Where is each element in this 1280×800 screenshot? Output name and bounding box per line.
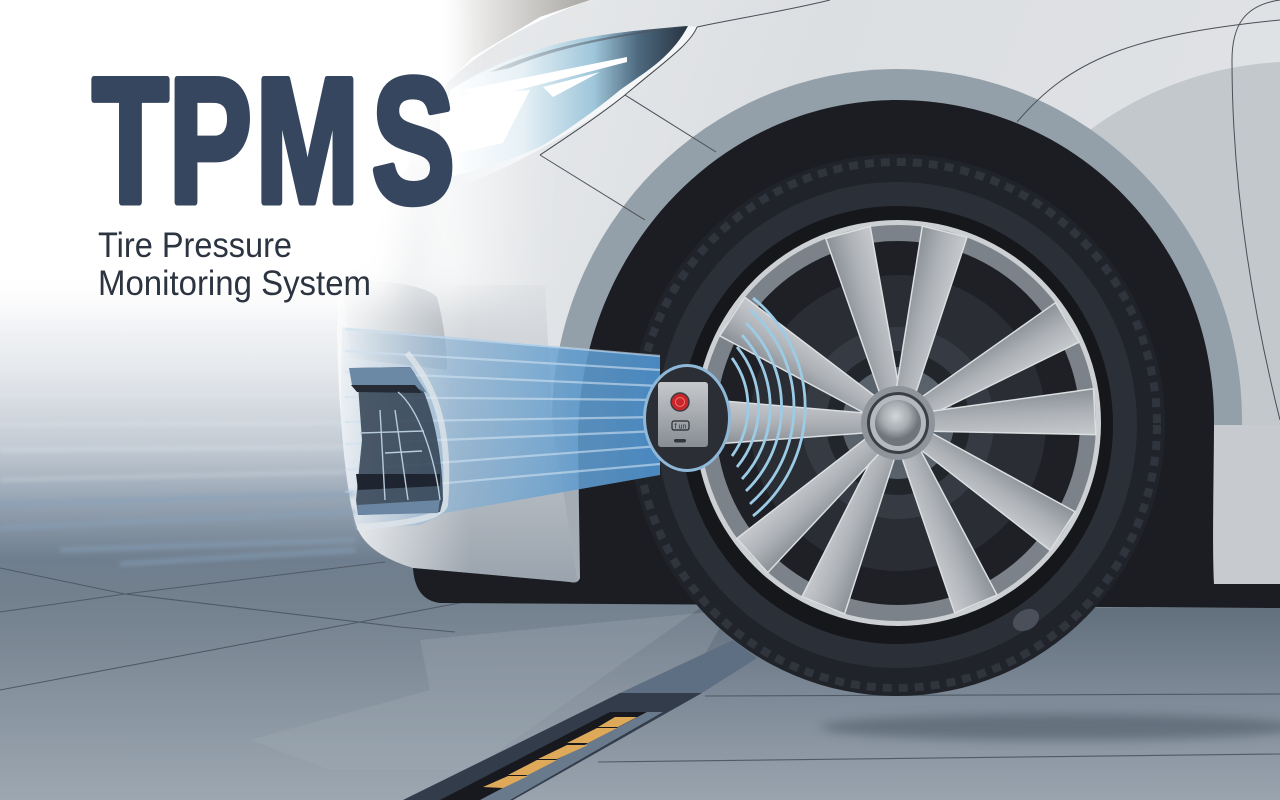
panel: front bumper — [337, 285, 580, 582]
signal waves — [732, 298, 805, 516]
panel: side shading right — [1090, 62, 1280, 584]
sensor red button — [671, 393, 689, 411]
body softening beside headlight — [420, 90, 540, 300]
subtitle: Monitoring System — [98, 264, 371, 303]
TPMS sensor: f un — [675, 424, 686, 430]
wheel arch interior — [413, 100, 1280, 608]
speed streaks over fog — [0, 367, 355, 564]
front air intake grille — [349, 367, 443, 515]
title: TPMS — [92, 41, 455, 240]
car body — [337, 0, 1280, 584]
bumper fade on left — [337, 285, 580, 582]
bumper light edge — [357, 353, 446, 527]
brake disc — [750, 275, 1046, 571]
bumper trim continuation — [552, 420, 590, 584]
blue signal beam — [340, 327, 660, 530]
hub cap — [861, 386, 935, 460]
bumper upper inset — [343, 281, 447, 370]
headlight — [440, 26, 697, 190]
shadow under car — [820, 714, 1280, 740]
speed ramp with amber sensor strip — [403, 640, 757, 800]
wheel rim — [695, 220, 1101, 626]
right lower panel — [1212, 425, 1280, 584]
TPMS sensor — [643, 364, 731, 472]
beam streaks — [345, 329, 660, 492]
sensor port — [674, 439, 686, 442]
spokes — [701, 226, 1096, 614]
wheel arch trim — [552, 69, 1242, 425]
subtitle: Tire Pressure — [98, 226, 292, 265]
white fade over car left side — [0, 0, 450, 300]
upper corner smudge — [430, 0, 590, 90]
subtitle — [98, 226, 371, 303]
amber lights — [483, 717, 637, 788]
floor joints — [0, 562, 1280, 762]
tire — [629, 154, 1165, 696]
sensor label — [672, 421, 689, 430]
floor: right — [430, 608, 1280, 800]
panel lines — [540, 0, 1280, 420]
floor reflection — [250, 610, 730, 770]
